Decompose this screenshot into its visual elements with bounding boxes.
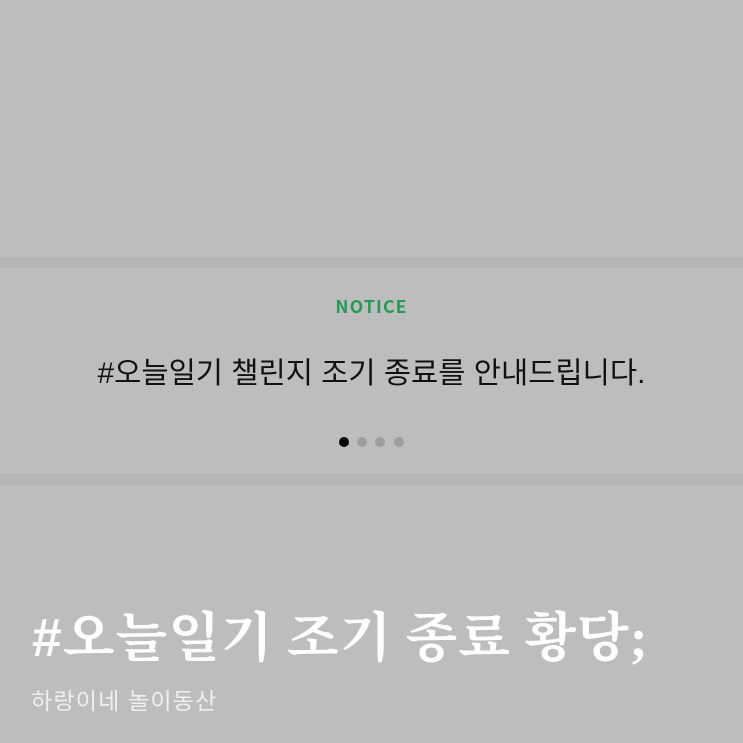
active dot [339,437,349,447]
panel: notice card [0,267,743,475]
panel: notice banner [0,257,743,486]
inactive dot 3 [375,437,385,447]
inactive dot 4 [394,437,404,447]
blog name subtitle: 하랑이네 놀이동산 [31,688,217,714]
notice label: NOTICE [335,294,408,319]
notice message: #오늘일기 챌린지 조기 종료를 안내드립니다. [98,357,645,390]
title: #오늘일기 조기 종료 황당; [32,608,649,668]
carousel pagination dots [339,437,404,447]
inactive dot 2 [357,437,367,447]
